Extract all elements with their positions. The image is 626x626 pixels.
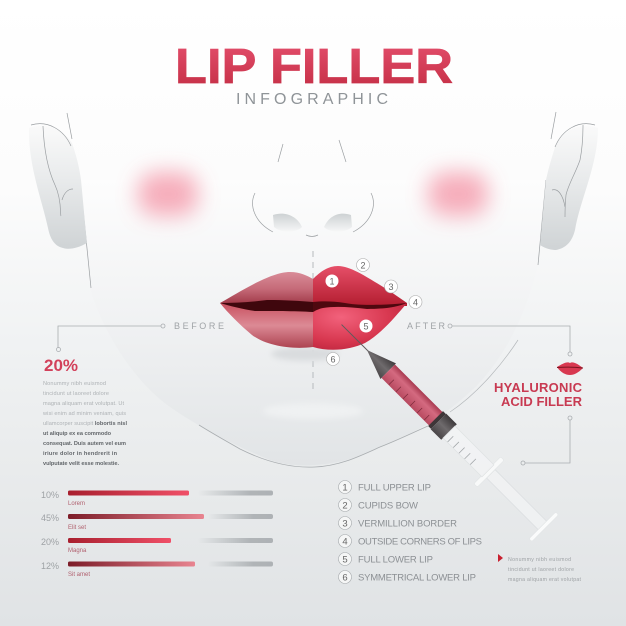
legend 4: 4	[342, 536, 348, 548]
plunger rod	[474, 457, 559, 542]
footnote text: tincidunt ut laoreet dolore	[508, 567, 574, 573]
legend 1: FULL UPPER LIP	[358, 482, 431, 494]
syringe body	[359, 342, 496, 479]
title: LIP FILLER	[175, 39, 453, 94]
bar chart	[41, 490, 273, 578]
marker 2: 2	[360, 260, 366, 270]
bar: 12%: Sit amet	[68, 572, 90, 578]
bar: 45%	[41, 513, 273, 531]
bar: 20%: Magna	[68, 548, 87, 554]
footnote marker	[498, 554, 503, 562]
lips: before half	[220, 272, 313, 348]
legend 2: 2	[342, 500, 348, 512]
lips: after half	[313, 266, 407, 350]
step markers on lips	[326, 258, 422, 366]
connector: before to 20%	[56, 324, 165, 352]
connector: filler to syringe	[521, 416, 572, 465]
description paragraph: consequat. Duis autem vel eum	[43, 441, 126, 447]
legend 5: 5	[342, 554, 348, 566]
marker 1: 1	[329, 276, 335, 286]
footnote text: Nonummy nibh euismod	[508, 557, 571, 563]
filler heading: HYALURONIC	[494, 380, 583, 395]
marker 4: 4	[413, 298, 418, 308]
marker 6: 6	[330, 354, 336, 364]
legend 6: SYMMETRICAL LOWER LIP	[358, 572, 476, 584]
right ear	[540, 124, 598, 250]
syringe	[328, 311, 559, 542]
filler heading	[494, 380, 583, 409]
needle	[342, 325, 368, 351]
bar: 20%	[41, 537, 273, 554]
legend 5: FULL LOWER LIP	[358, 554, 433, 566]
left ear	[29, 124, 87, 249]
legend 4: OUTSIDE CORNERS OF LIPS	[358, 536, 482, 548]
percentage heading: 20%	[44, 357, 78, 375]
bar: 12%	[41, 561, 273, 578]
bar: 10%: 10%	[41, 490, 59, 500]
description paragraph: wisi enim ad minim veniam, quis	[42, 411, 126, 417]
legend 3: 3	[342, 518, 348, 530]
legend 5	[338, 552, 433, 566]
after label: AFTER	[407, 321, 446, 331]
bar: 20%: 20%	[41, 537, 59, 547]
before label: BEFORE	[174, 321, 224, 331]
numbered legend	[338, 480, 482, 584]
legend 1	[338, 480, 431, 494]
bar: 10%: Lorem	[68, 501, 85, 507]
marker 3: 3	[388, 282, 394, 292]
right cheek blush	[428, 172, 488, 216]
footnote text	[508, 557, 582, 583]
description paragraph: ut aliquip ex ea commodo	[43, 431, 112, 437]
connector: after to filler	[448, 324, 572, 356]
description paragraph	[42, 381, 127, 467]
legend 6: 6	[342, 572, 348, 584]
hyaluronic lip icon	[557, 362, 583, 375]
legend 3: VERMILLION BORDER	[358, 518, 457, 530]
description paragraph: tincidunt ut laoreet dolore	[43, 391, 109, 397]
footnote text: magna aliquam erat volutpat	[508, 577, 582, 583]
legend 2: CUPIDS BOW	[358, 500, 418, 512]
description paragraph: magna aliquam erat volutpat. Ut	[43, 401, 124, 407]
nose	[253, 140, 373, 236]
bar: 10%	[41, 490, 273, 507]
description paragraph: iriure dolor in hendrerit in	[43, 451, 118, 457]
filler heading: ACID FILLER	[501, 394, 583, 409]
bar: 45%: 45%	[41, 513, 59, 523]
description paragraph: ullamcorper suscipit lobortis nisl	[43, 421, 127, 427]
subtitle: INFOGRAPHIC	[236, 91, 388, 108]
center divider	[312, 251, 314, 390]
face shape	[67, 112, 556, 467]
legend 1: 1	[342, 482, 348, 494]
bar: 45%: Elit set	[68, 525, 86, 531]
left cheek blush	[138, 172, 198, 216]
bar: 12%: 12%	[41, 561, 59, 571]
marker 5: 5	[363, 322, 369, 332]
lips	[220, 266, 407, 361]
description paragraph: Nonummy nibh euismod	[43, 381, 106, 387]
legend 2	[338, 498, 418, 512]
description paragraph: vulputate velit esse molestie.	[43, 461, 119, 467]
